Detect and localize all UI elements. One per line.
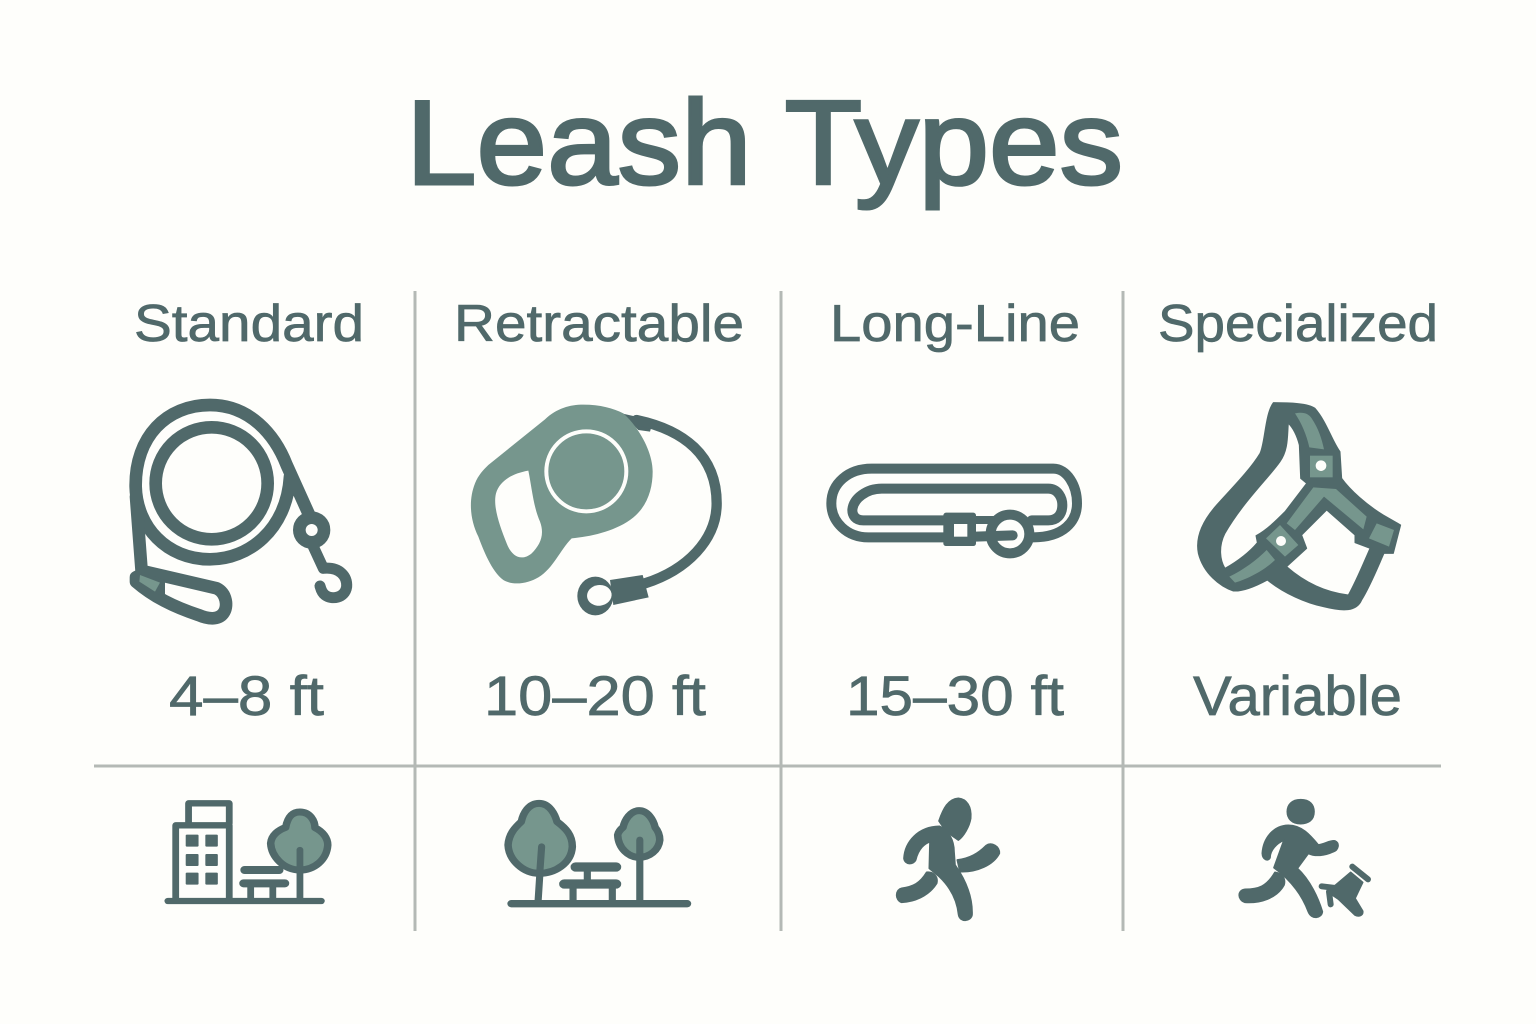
range label: Long-Line: 15–30 ft (846, 664, 1064, 727)
icon: city building, bench and tree (168, 803, 328, 901)
icon: jogging runner (897, 798, 999, 920)
column heading: Standard: Standard (134, 295, 364, 353)
column heading: Retractable: Retractable (454, 295, 744, 353)
range label: Standard: 4–8 ft (169, 664, 324, 727)
title: Leash Types (406, 76, 1123, 210)
column heading: Specialized: Specialized (1158, 295, 1438, 353)
icon: retractable leash (471, 405, 717, 615)
icon: runner with dog (1239, 800, 1368, 917)
icon: specialized harness (1198, 403, 1401, 610)
icon: standard coiled leash (136, 405, 347, 618)
range label: Retractable: 10–20 ft (484, 664, 706, 727)
range label: Specialized: Variable (1193, 664, 1402, 727)
column heading: Long-Line: Long-Line (830, 295, 1080, 353)
icon: park trees and bench (508, 803, 687, 904)
icon: long-line leash (831, 469, 1077, 553)
